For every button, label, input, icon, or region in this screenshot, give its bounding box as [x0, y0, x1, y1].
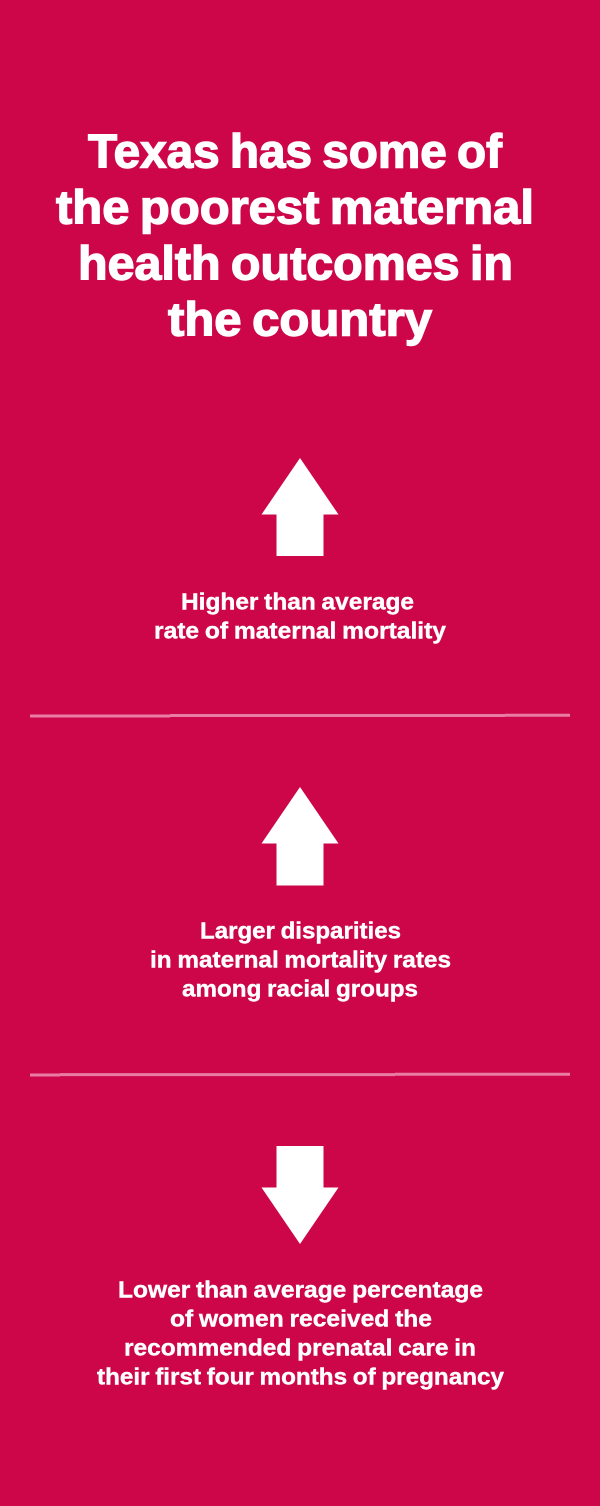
title	[56, 124, 534, 346]
icon: up arrow, disparities	[262, 787, 338, 886]
text: lower prenatal care	[97, 1276, 504, 1390]
title: the poorest maternal	[56, 180, 534, 234]
icon: up arrow, maternal mortality	[262, 458, 338, 556]
text: larger disparities	[150, 918, 451, 1002]
title: Texas has some of	[88, 124, 502, 178]
text: lower prenatal care: Lower than average percentage	[118, 1276, 483, 1302]
text: larger disparities: among racial groups	[182, 976, 418, 1002]
text: larger disparities: in maternal mortality rates	[150, 946, 451, 972]
text: lower prenatal care: of women received the	[170, 1306, 432, 1332]
icon: down arrow, prenatal care	[262, 1146, 338, 1244]
title: the country	[168, 292, 432, 346]
text: larger disparities: Larger disparities	[200, 918, 401, 944]
text: higher maternal mortality: Higher than average	[181, 588, 414, 614]
title: health outcomes in	[78, 236, 513, 290]
text: higher maternal mortality	[154, 588, 446, 644]
text: lower prenatal care: their first four months of pregnancy	[97, 1364, 504, 1390]
text: higher maternal mortality: rate of maternal mortality	[154, 618, 446, 644]
text: lower prenatal care: recommended prenatal care in	[124, 1334, 476, 1360]
